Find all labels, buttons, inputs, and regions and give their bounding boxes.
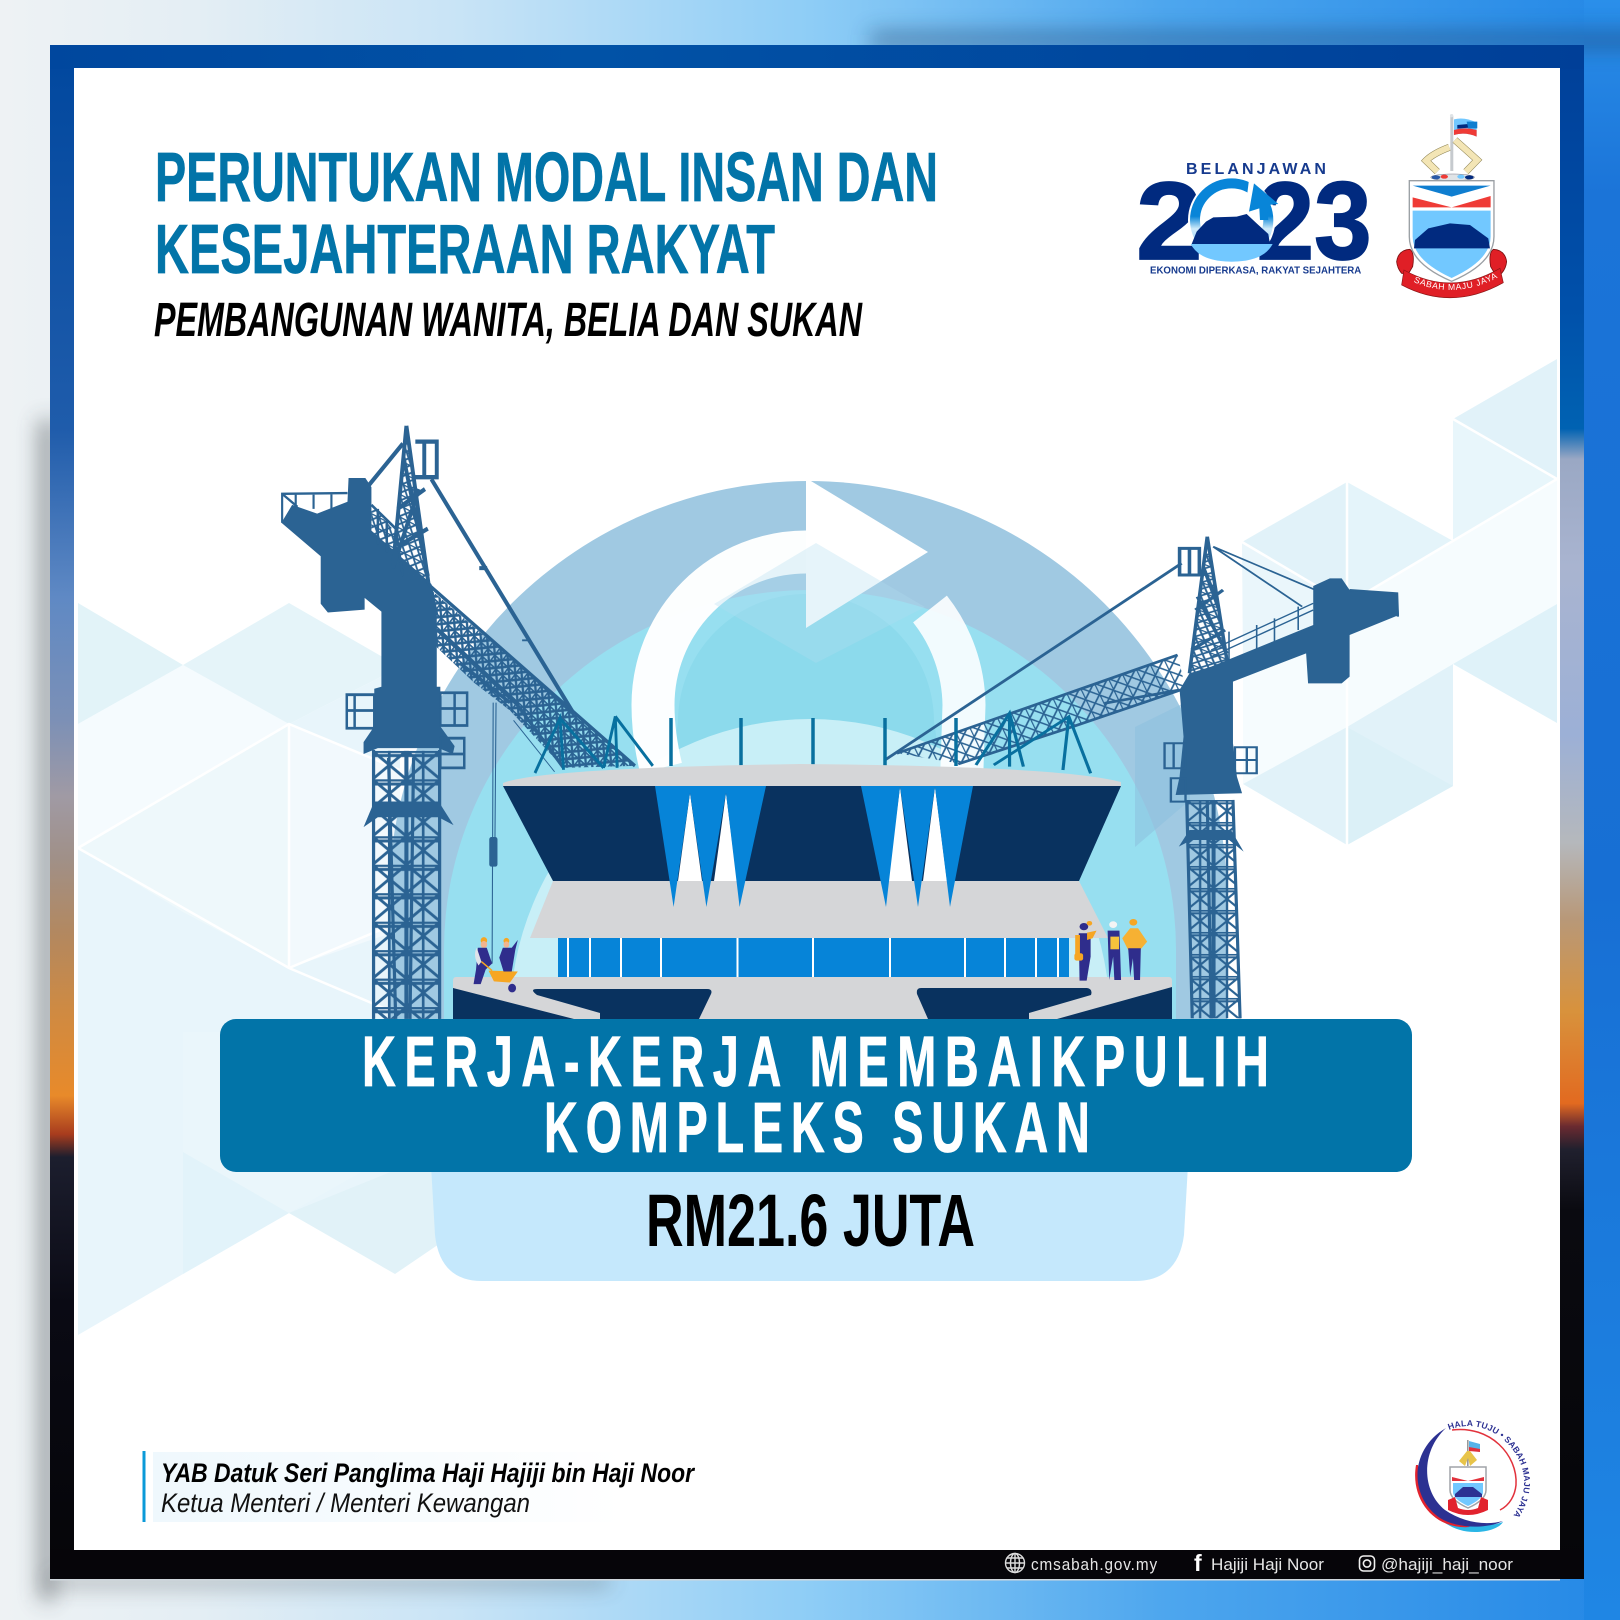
logo: Belanjawan 2023: BELANJAWAN — [1186, 161, 1326, 178]
amount: RM21.6 JUTA — [646, 1179, 975, 1262]
window band — [558, 938, 1069, 977]
logo: Sabah coat of arms — [1396, 114, 1508, 298]
workers with wheelbarrow — [474, 937, 518, 992]
logo: Belanjawan 2023 — [1136, 160, 1372, 283]
icon: instagram — [1360, 1556, 1374, 1571]
ribbon: SABAH MAJU JAYA — [1414, 273, 1498, 290]
workers group — [1074, 919, 1147, 981]
amount backing panel — [431, 1165, 1188, 1281]
banner — [220, 1019, 1412, 1172]
right tower crane — [885, 537, 1399, 1018]
banner heading — [362, 1022, 1269, 1167]
left hexagon pattern — [78, 603, 445, 1335]
blue facade spikes — [655, 786, 973, 907]
roof poles — [671, 718, 956, 766]
logo: Belanjawan 2023: EKONOMI DIPERKASA, RAKYAT SEJAHTERA — [1150, 266, 1361, 277]
white facade gaps — [678, 787, 947, 881]
social footer: cmsabah.gov.my — [1031, 1555, 1158, 1574]
icon: facebook: f — [1194, 1550, 1202, 1576]
title — [155, 138, 938, 288]
signature block: YAB Datuk Seri Panglima Haji Hajiji bin Haji Noor — [161, 1458, 695, 1488]
icon: globe — [1006, 1554, 1024, 1572]
logo: Hala Tuju Sabah Maju Jaya: HALA TUJU • SABAH MAJU JAYA — [1448, 1420, 1530, 1517]
roof — [503, 764, 1121, 786]
logo: Belanjawan 2023: 23 — [1257, 160, 1372, 283]
lower deck — [453, 977, 1172, 1019]
banner heading: KOMPLEKS SUKAN — [544, 1088, 1090, 1167]
right hexagon pattern — [1242, 359, 1557, 845]
mid tier — [530, 881, 1108, 938]
ribbon — [1396, 248, 1508, 298]
upper facade — [503, 786, 1121, 881]
left tower crane — [281, 426, 653, 1019]
social footer — [1006, 1550, 1513, 1576]
title: KESEJAHTERAAN RAKYAT — [155, 210, 775, 288]
logo: Hala Tuju Sabah Maju Jaya — [1415, 1420, 1530, 1532]
title: PERUNTUKAN MODAL INSAN DAN — [155, 138, 938, 216]
logo: Belanjawan 2023: 2 — [1136, 160, 1203, 283]
signature block — [142, 1451, 695, 1522]
banner heading: KERJA-KERJA MEMBAIKPULIH — [362, 1022, 1269, 1101]
social footer: @hajiji_haji_noor — [1381, 1555, 1513, 1574]
social footer: Hajiji Haji Noor — [1211, 1555, 1324, 1574]
shield — [1409, 181, 1494, 281]
circular backdrop with refresh arrow — [389, 478, 1227, 1019]
subtitle: PEMBANGUNAN WANITA, BELIA DAN SUKAN — [154, 294, 863, 347]
flag and arms — [1426, 114, 1477, 181]
signature block: Ketua Menteri / Menteri Kewangan — [161, 1488, 530, 1518]
stadium building — [453, 718, 1172, 1019]
